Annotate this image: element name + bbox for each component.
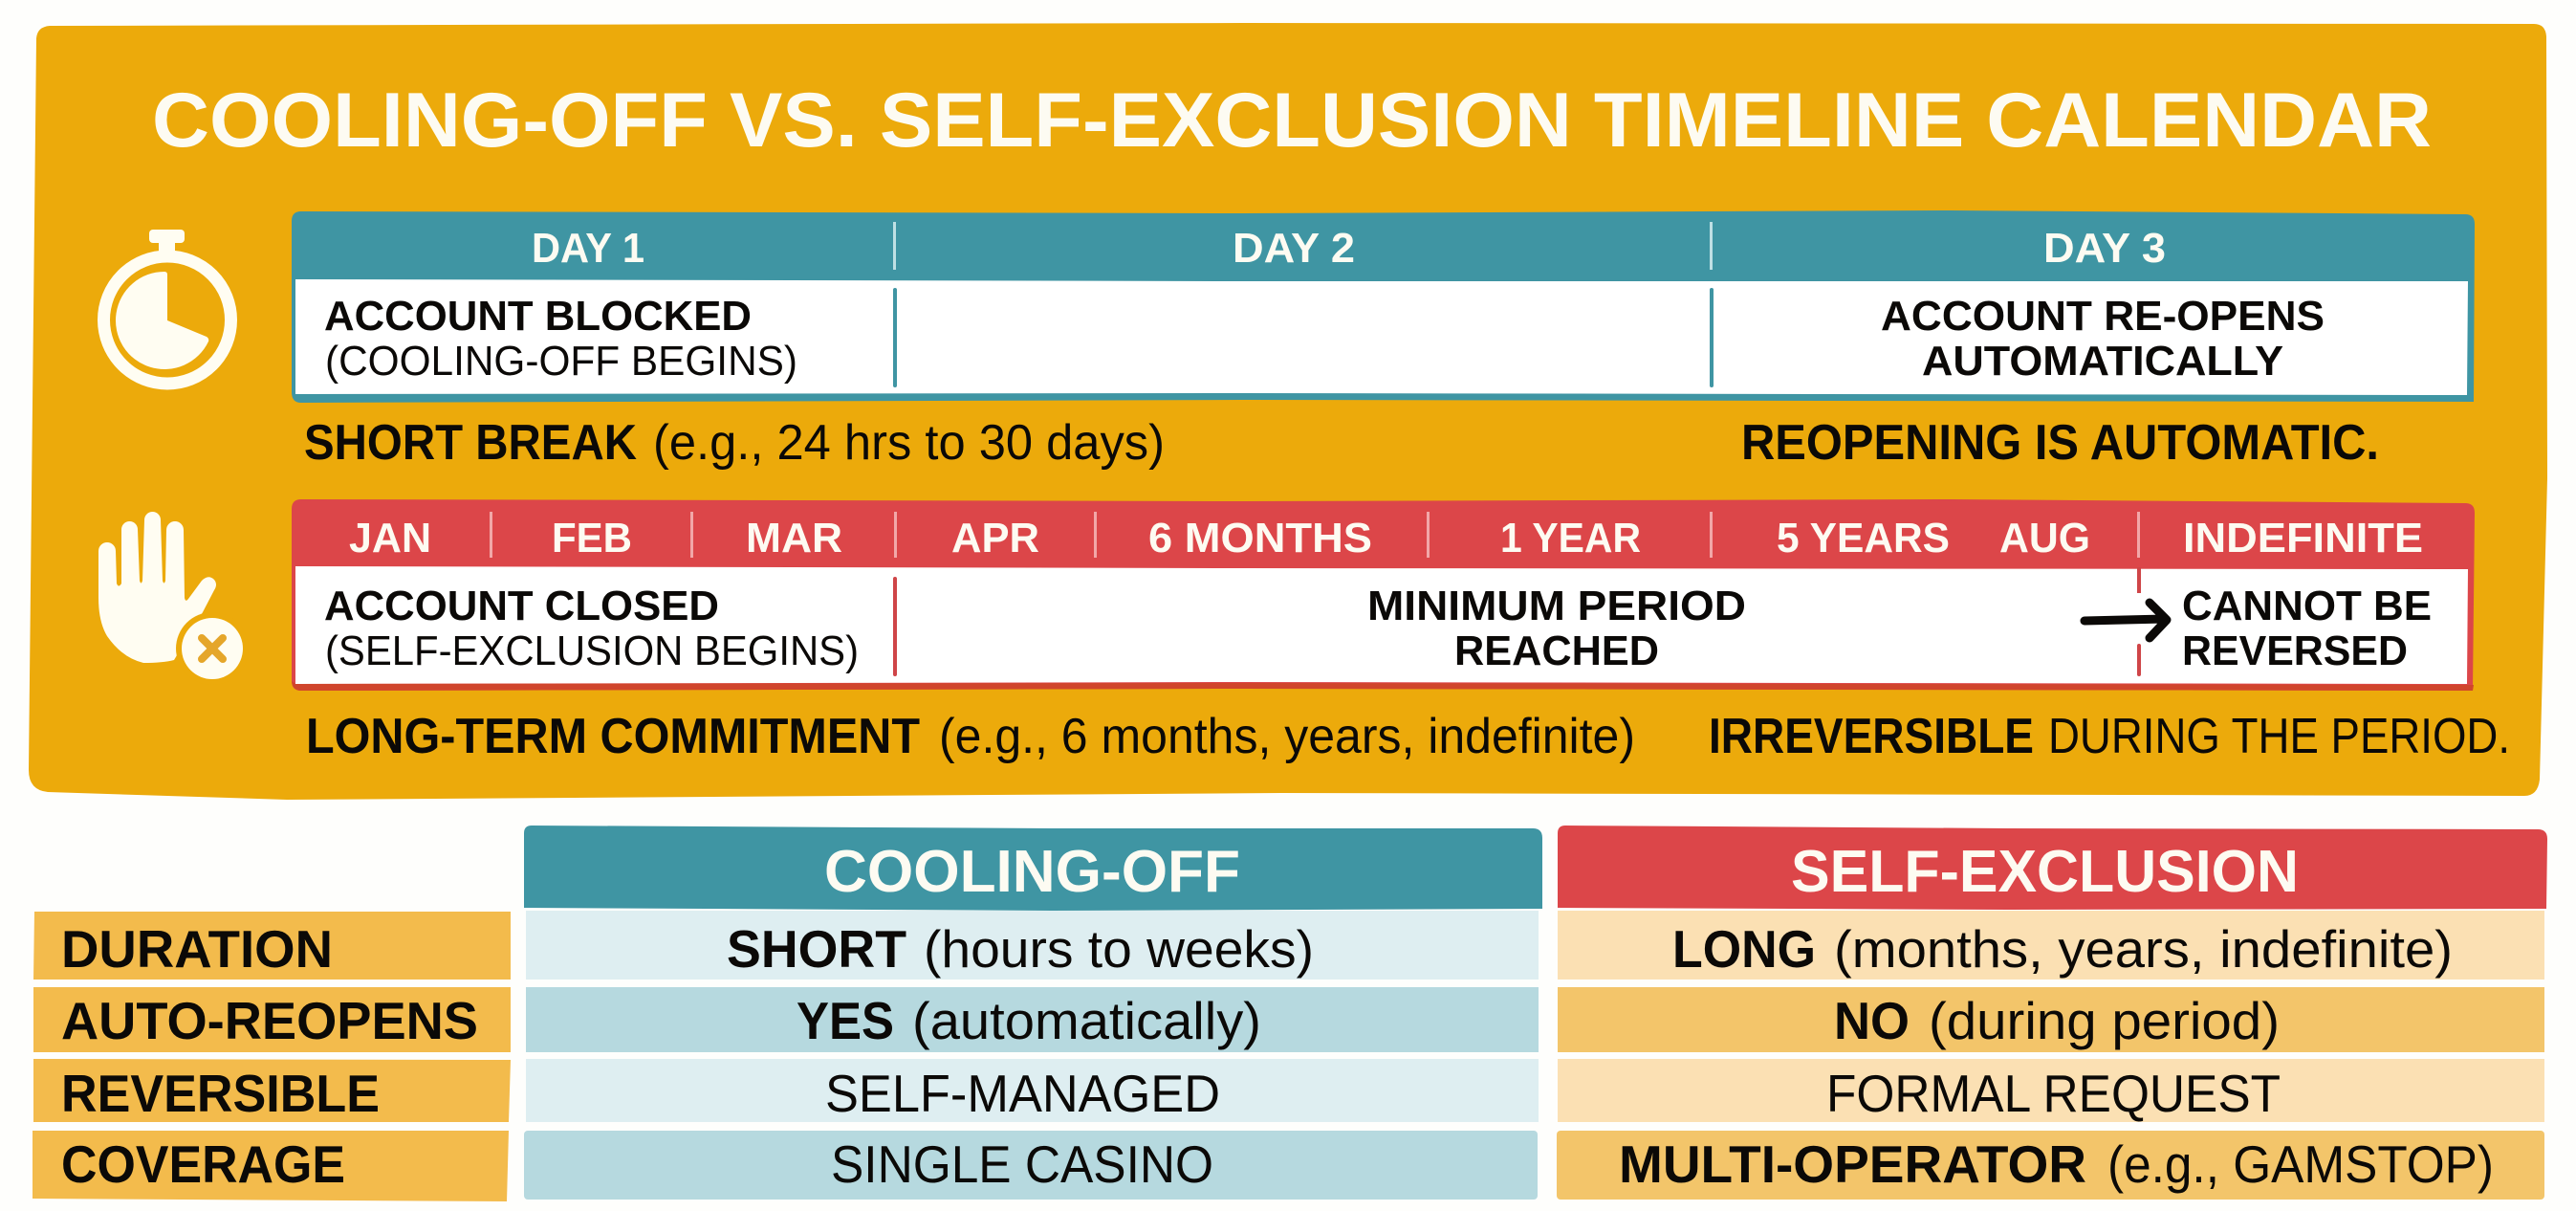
caption: irreversible during the period: DURING THE PERIOD.: [2048, 709, 2510, 764]
text: cannot be: CANNOT BE: [2182, 583, 2432, 629]
caption: long-term commitment: LONG-TERM COMMITMENT: [306, 709, 920, 764]
caption: reopening is automatic: REOPENING IS AUTOMATIC.: [1741, 415, 2379, 471]
text: minimum period: MINIMUM PERIOD: [1367, 583, 1746, 629]
caption: long-term commitment: [306, 709, 1635, 764]
caption: irreversible during the period: [1709, 709, 2510, 764]
text: reached: REACHED: [1454, 628, 1659, 674]
label: day 1: DAY 1: [532, 225, 644, 272]
label: 6 months: 6 MONTHS: [1148, 515, 1372, 561]
cell: yes: YES: [797, 991, 894, 1050]
cell: long: (months, years, indefinite): [1834, 919, 2453, 979]
cell: no: NO: [1834, 991, 1910, 1050]
caption: short break: (e.g., 24 hrs to 30 days): [653, 415, 1165, 471]
cell: no: (during period): [1929, 991, 2280, 1050]
heading: self-exclusion: SELF-EXCLUSION: [1791, 839, 2299, 905]
column: cooling-off: [524, 826, 1542, 1200]
label: day 3: DAY 3: [2043, 225, 2166, 272]
arrow: [2085, 603, 2167, 638]
cell: multi-operator: MULTI-OPERATOR: [1619, 1134, 2086, 1194]
cell: multi-operator: (e.g., GAMSTOP): [2107, 1134, 2494, 1194]
cell: formal request: FORMAL REQUEST: [1826, 1064, 2281, 1123]
text: self-exclusion begins: (SELF-EXCLUSION BEGINS): [325, 628, 859, 674]
column: self-exclusion: [1557, 826, 2547, 1200]
text: account re-opens: ACCOUNT RE-OPENS: [1881, 293, 2325, 340]
label: feb: FEB: [552, 515, 632, 561]
label: duration: DURATION: [61, 919, 333, 979]
text: automatically: AUTOMATICALLY: [1922, 338, 2283, 385]
cell: single casino: SINGLE CASINO: [831, 1134, 1213, 1194]
cell: long: LONG: [1672, 919, 1816, 979]
label: 1 year: 1 YEAR: [1500, 515, 1641, 561]
text: cooling-off begins: (COOLING-OFF BEGINS): [325, 338, 797, 385]
cell: multi-operator: [1619, 1134, 2494, 1194]
label: auto-reopens: AUTO-REOPENS: [61, 991, 478, 1050]
cell: short: [727, 919, 1314, 979]
label: 5 years: 5 YEARS: [1777, 515, 1950, 561]
label: reversible: REVERSIBLE: [61, 1064, 380, 1123]
icon: hand with x badge: [98, 512, 249, 685]
cell: self-managed: SELF-MANAGED: [825, 1064, 1220, 1123]
timeline: self-exclusion: [292, 499, 2475, 691]
comparison table: [33, 826, 2547, 1201]
caption: short break: SHORT BREAK: [304, 415, 637, 471]
title: COOLING-OFF VS. SELF-EXCLUSION TIMELINE CALENDAR: [152, 77, 2432, 164]
label: day 2: DAY 2: [1233, 225, 1355, 272]
text: account blocked: ACCOUNT BLOCKED: [324, 293, 752, 340]
label: aug: AUG: [1999, 515, 2090, 561]
label: indefinite: INDEFINITE: [2183, 515, 2423, 561]
timeline: cooling-off: [292, 210, 2475, 403]
cell: yes: (automatically): [912, 991, 1261, 1050]
text: reversed: REVERSED: [2182, 628, 2408, 674]
panel: timeline calendar: [29, 23, 2547, 800]
icon: stopwatch: [103, 230, 231, 384]
cell: short: SHORT: [727, 919, 906, 979]
cell: short: (hours to weeks): [924, 919, 1314, 979]
label: jan: JAN: [349, 515, 431, 561]
caption: long-term commitment: (e.g., 6 months, years, indefinite): [939, 709, 1635, 764]
column: row labels: [33, 912, 511, 1201]
heading: cooling-off: COOLING-OFF: [824, 839, 1240, 905]
label: mar: MAR: [746, 515, 842, 561]
caption: short break: [304, 415, 1165, 471]
text: account closed: ACCOUNT CLOSED: [324, 583, 719, 629]
label: apr: APR: [951, 515, 1039, 561]
caption: irreversible during the period: IRREVERSIBLE: [1709, 709, 2034, 764]
label: coverage: COVERAGE: [61, 1134, 345, 1194]
